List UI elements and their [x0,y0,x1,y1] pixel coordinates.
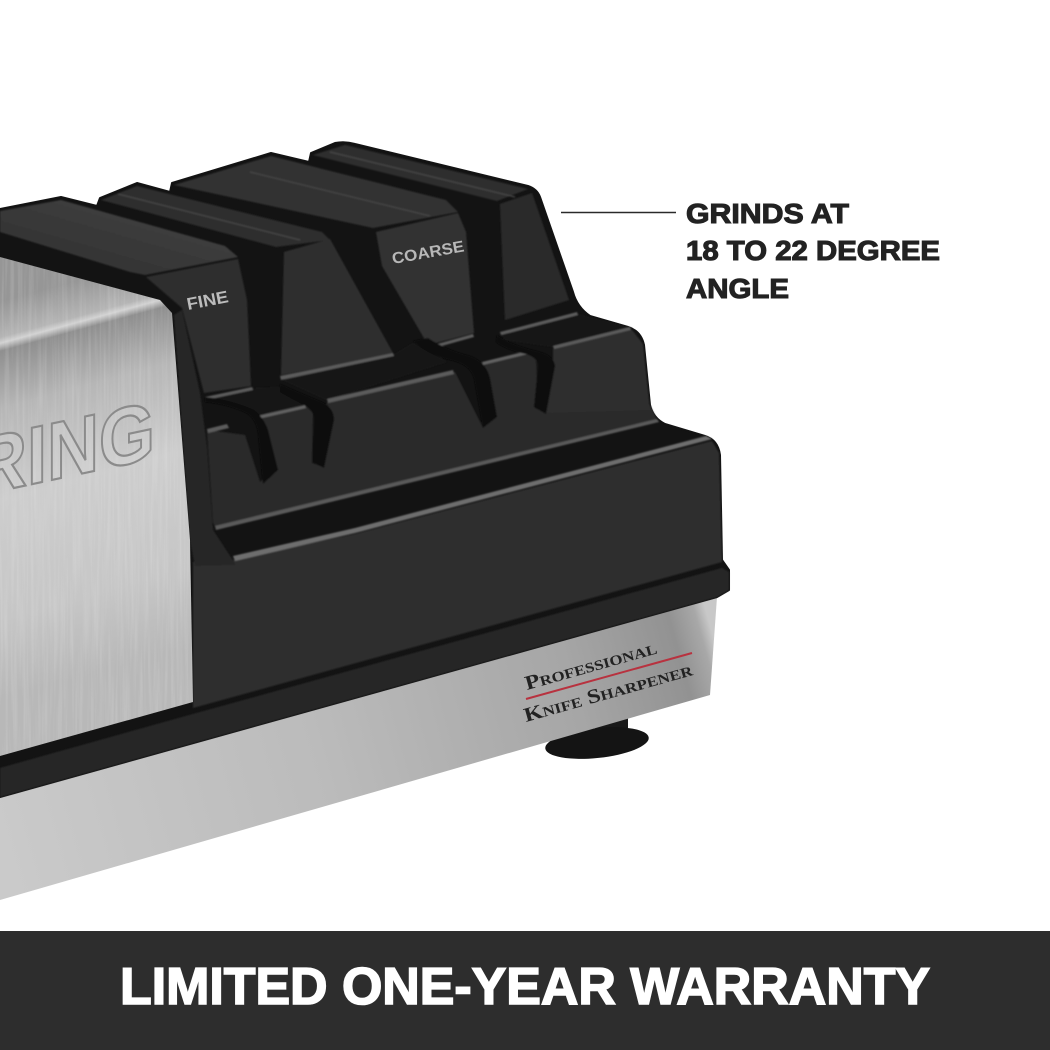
product label [521,637,696,727]
callout text: GRINDS AT [686,198,849,229]
red rule [526,653,692,699]
housing side strip by the panel [174,310,236,566]
callout text [686,198,940,304]
thin ridge face [281,239,393,375]
back ridge face [500,193,569,320]
lower front of sharpening guides [207,372,657,527]
centre ledge highlights [280,334,474,403]
label line: knife sharpener: Knife Sharpener [521,658,696,727]
wide ridge top [174,156,458,228]
label: coarse: COARSE [391,238,466,268]
groove highlight [233,436,712,561]
groove edge line [215,419,659,530]
left notch insert [257,405,313,470]
coarse face [376,213,474,345]
label line: professional: Professional [522,637,659,695]
lower housing front [193,441,722,708]
thin ridge top [101,186,330,247]
ridge highlights [118,152,515,240]
warranty banner [0,931,1050,1050]
label: fine: FINE [185,287,230,314]
right notch insert [482,351,538,417]
back ridge top [313,145,528,201]
rubber foot [544,715,650,763]
callout leader line [561,212,676,214]
steel front panel [0,257,193,756]
stainless base plate [0,597,717,900]
right ledge highlights [500,312,631,349]
callout text: ANGLE [686,273,789,304]
left block top [0,200,238,275]
fine face [146,259,251,393]
product: knife sharpener [0,142,729,900]
right ledge top [500,314,632,347]
left ledge top [206,387,305,416]
centre ledge top [283,343,447,400]
black band above base [0,568,729,797]
notch channels [205,335,555,484]
housing faces [0,145,729,797]
right guide block [545,330,650,413]
black housing silhouette [0,142,729,797]
callout text: 18 TO 22 DEGREE [686,235,940,266]
banner heading: LIMITED ONE-YEAR WARRANTY [120,958,930,1016]
